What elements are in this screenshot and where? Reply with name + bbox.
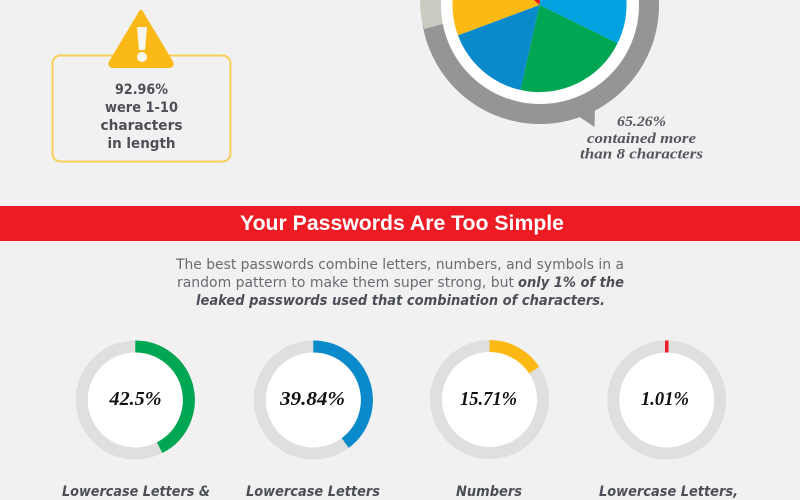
donut: 42.5%: 42.5% bbox=[108, 388, 162, 410]
donut: 1.01%: 1.01% bbox=[641, 388, 689, 410]
intro paragraph: only 1% of the bbox=[518, 275, 624, 291]
callout text bbox=[100, 82, 182, 152]
section banner bbox=[0, 206, 800, 241]
donut: 39.84% bbox=[260, 346, 367, 454]
callout text: characters bbox=[100, 118, 182, 134]
icon: warning triangle bbox=[110, 12, 172, 66]
donut: 42.5% bbox=[82, 346, 189, 454]
intro paragraph: The best passwords combine letters, numbers, and symbols in a bbox=[175, 257, 624, 273]
donut labels: Lowercase Letters & bbox=[62, 484, 210, 500]
pie caption: 65.26% bbox=[617, 114, 666, 130]
pie chart: password length bbox=[420, 0, 659, 127]
donut labels: Lowercase Letters bbox=[246, 484, 380, 500]
intro paragraph bbox=[175, 257, 624, 309]
pie slices bbox=[452, 0, 626, 92]
pie caption: than 8 characters bbox=[580, 146, 703, 162]
callout: password length warning bbox=[52, 12, 230, 162]
callout text: were 1-10 bbox=[105, 100, 178, 116]
intro paragraph: leaked passwords used that combination of characters. bbox=[196, 293, 605, 309]
donut: 1.01% bbox=[613, 340, 720, 454]
donut: 39.84%: 39.84% bbox=[279, 388, 345, 410]
pie caption bbox=[580, 114, 703, 162]
warning text box bbox=[52, 56, 230, 162]
callout text: 92.96% bbox=[115, 82, 168, 98]
donut labels bbox=[62, 484, 738, 500]
pie caption: contained more bbox=[587, 131, 696, 147]
donut labels: Lowercase Letters, bbox=[599, 484, 738, 500]
intro paragraph: random pattern to make them super strong, but bbox=[177, 275, 514, 291]
donut: 15.71% bbox=[436, 346, 543, 453]
callout text: in length bbox=[108, 136, 176, 152]
donut: 15.71%: 15.71% bbox=[460, 388, 517, 410]
speech bubble ring bbox=[420, 0, 659, 127]
banner heading: Your Passwords Are Too Simple bbox=[240, 212, 564, 235]
donut labels: Numbers bbox=[456, 484, 522, 500]
